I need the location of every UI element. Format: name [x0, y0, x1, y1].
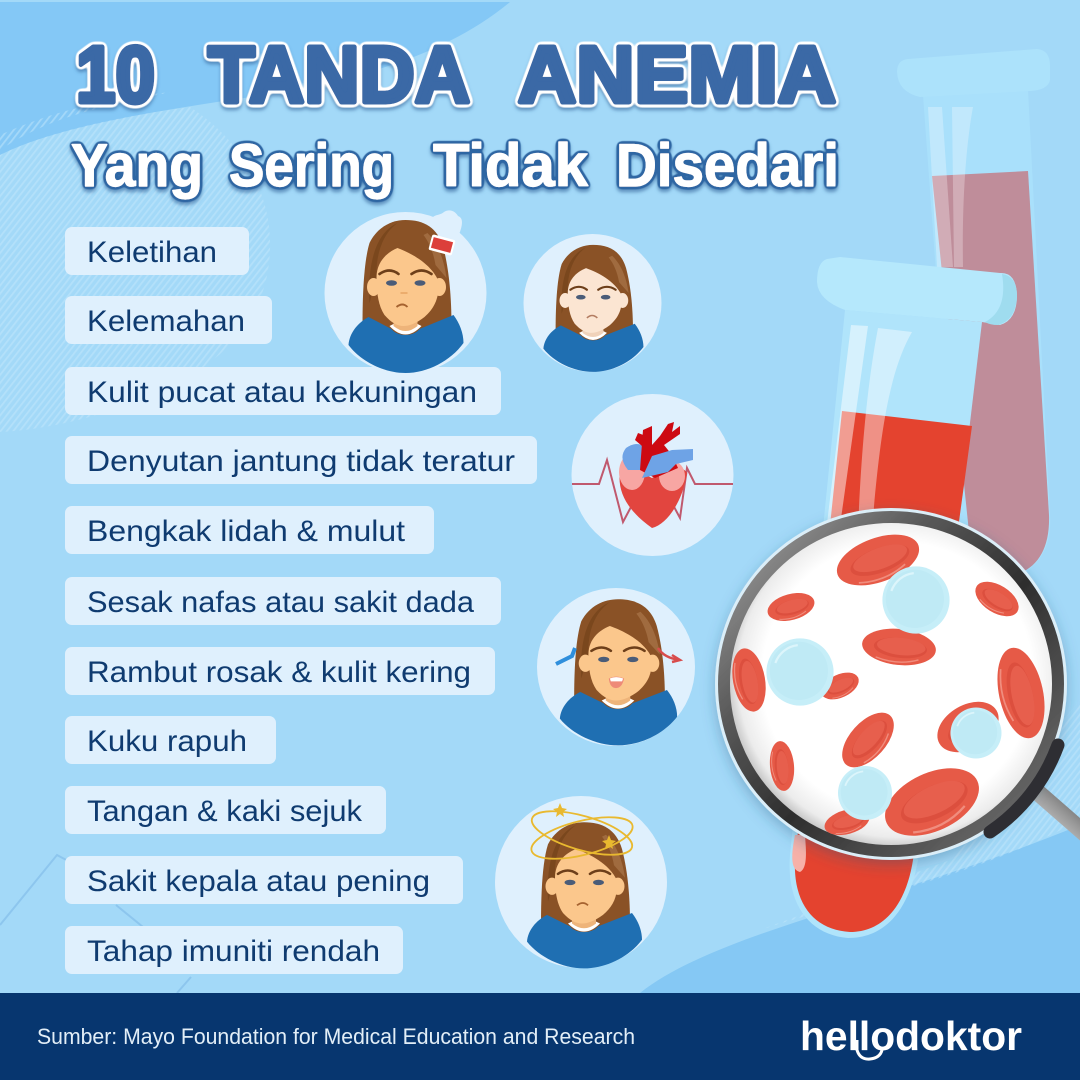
- title: TANDA: [208, 30, 470, 119]
- symptom: Bengkak lidah & mulut: Bengkak lidah & mulut: [87, 515, 406, 548]
- symptom: Keletihan: Keletihan: [87, 236, 217, 269]
- source text: Sumber: Mayo Foundation for Medical Education and Research: [37, 1024, 635, 1049]
- symptom: Tahap imuniti rendah: Tahap imuniti rendah: [87, 935, 380, 968]
- icon: heart with ECG line: [572, 394, 734, 556]
- symptom: Bengkak lidah & mulut: [65, 506, 434, 554]
- icon: orbit rings and stars: [527, 802, 637, 867]
- grip: [990, 745, 1058, 832]
- footer bar: [0, 993, 1080, 1080]
- symptom: Keletihan: [65, 227, 249, 275]
- icon: dizzy girl: [495, 796, 667, 968]
- subtitle: Disedari: [616, 132, 839, 199]
- symptom: Rambut rosak & kulit kering: Rambut rosak & kulit kering: [87, 656, 471, 689]
- title: ANEMIA: [518, 30, 836, 119]
- symptom: Kuku rapuh: [65, 716, 276, 764]
- symptom: Sesak nafas atau sakit dada: Sesak nafas atau sakit dada: [87, 586, 474, 619]
- logo: hellodoktor: hellodoktor: [800, 1013, 1022, 1059]
- symptom: Kelemahan: [65, 296, 272, 344]
- test tube: front: [790, 257, 1017, 938]
- symptom: Rambut rosak & kulit kering: [65, 647, 495, 695]
- symptom: Kelemahan: Kelemahan: [87, 305, 245, 338]
- symptom: Tahap imuniti rendah: [65, 926, 403, 974]
- symptom: Sesak nafas atau sakit dada: [65, 577, 501, 625]
- symptom: Tangan & kaki sejuk: [65, 786, 386, 834]
- symptom: Denyutan jantung tidak teratur: [65, 436, 537, 484]
- icon: girl with hair and skin problems: [537, 588, 695, 746]
- handle: [1035, 790, 1080, 838]
- symptom: Denyutan jantung tidak teratur: Denyutan jantung tidak teratur: [87, 445, 515, 478]
- subtitle: Sering: [229, 132, 394, 199]
- magnifying glass: [715, 508, 1080, 860]
- arrow: red: [658, 648, 680, 662]
- subtitle: Tidak: [433, 132, 589, 199]
- symptom: Sakit kepala atau pening: Sakit kepala atau pening: [87, 865, 430, 898]
- symptom: Tangan & kaki sejuk: Tangan & kaki sejuk: [87, 795, 363, 828]
- symptom: Kulit pucat atau kekuningan: [65, 367, 501, 415]
- white blood cells: [766, 566, 1002, 820]
- lens: [715, 508, 1067, 860]
- subtitle: Yang: [71, 132, 203, 199]
- subtitle: [71, 132, 839, 199]
- title: [76, 30, 836, 119]
- title: 10: [76, 30, 155, 119]
- symptom: Kuku rapuh: Kuku rapuh: [87, 725, 247, 758]
- arrow: blue: [556, 648, 575, 664]
- symptom: Sakit kepala atau pening: [65, 856, 463, 904]
- test tube: back: [897, 49, 1050, 600]
- blood cells: [728, 525, 1052, 849]
- icon: tired girl with low battery: [324, 210, 486, 374]
- icon: pale girl: [524, 234, 662, 372]
- icon: low battery: [428, 234, 456, 256]
- symptom: Kulit pucat atau kekuningan: Kulit pucat atau kekuningan: [87, 376, 477, 409]
